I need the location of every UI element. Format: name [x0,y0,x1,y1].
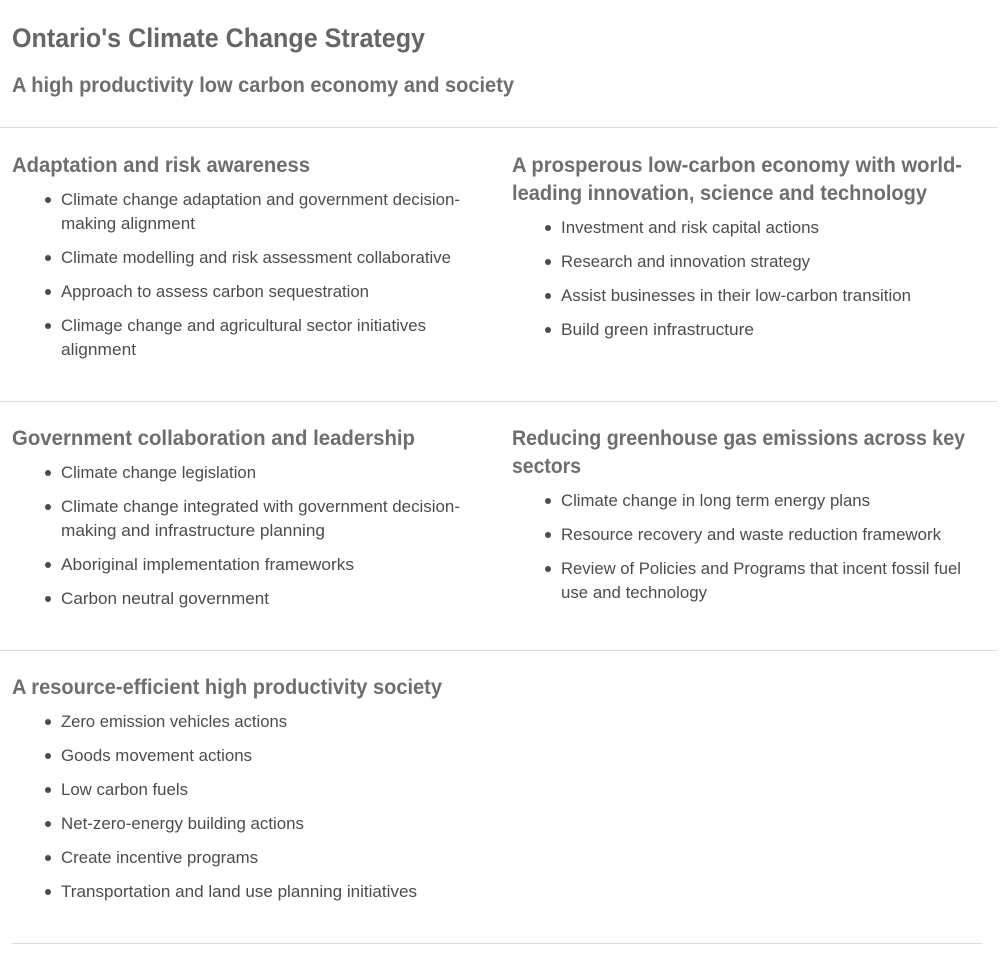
list: government items [45,464,460,608]
heading: emissions: Reducing greenhouse gas emissions across key [512,427,965,450]
heading: prosperous economy: leading innovation, science and technology [512,182,927,205]
list: government items: Climate change legislation [61,464,256,482]
heading: prosperous economy [512,154,962,205]
subtitle: A high productivity low carbon economy and society [12,74,514,97]
list: society items: Goods movement actions [61,747,252,765]
panel: adaptation and risk awareness [12,154,460,359]
list: emissions items: use and technology [561,584,708,602]
title: Ontario's Climate Change Strategy [12,23,425,53]
list: society items: Zero emission vehicles actions [61,713,287,731]
list: government items: Climate change integrated with government decision- [61,498,460,516]
list: adaptation items: making alignment [61,215,195,233]
list: adaptation items: Climage change and agricultural sector initiatives [61,317,426,335]
heading: emissions [512,427,965,478]
heading: society: A resource-efficient high productivity society [12,676,442,699]
list: adaptation items: Climate modelling and risk assessment collaborative [61,249,451,267]
panel: resource-efficient society [12,676,442,901]
list: economy items: Build green infrastructure [561,321,754,339]
list: economy items: Investment and risk capital actions [561,219,819,237]
list: society items [45,713,417,901]
list: economy items [545,219,911,339]
list: government items: Carbon neutral government [61,590,269,608]
list: adaptation items: Approach to assess carbon sequestration [61,283,369,301]
list: emissions items [545,492,961,602]
list: emissions items: Review of Policies and Programs that incent fossil fuel [561,560,961,578]
panel: prosperous low-carbon economy [512,154,962,339]
heading: adaptation: Adaptation and risk awareness [12,154,310,177]
heading: prosperous economy: A prosperous low-carbon economy with world- [512,154,962,177]
list: adaptation items: alignment [61,341,136,359]
list: society items: Create incentive programs [61,849,258,867]
list: society items: Net-zero-energy building actions [61,815,304,833]
heading: emissions: sectors [512,455,581,478]
list: government items: Aboriginal implementation frameworks [61,556,354,574]
heading: government: Government collaboration and leadership [12,427,415,450]
list: emissions items: Resource recovery and waste reduction framework [561,526,942,544]
panel: government collaboration [12,427,460,608]
list: adaptation items [45,191,460,359]
list: adaptation items: Climate change adaptation and government decision- [61,191,460,209]
list: emissions items: Climate change in long term energy plans [561,492,870,510]
list: society items: Low carbon fuels [61,781,188,799]
list: government items: making and infrastructure planning [61,522,325,540]
list: economy items: Assist businesses in their low-carbon transition [561,287,911,305]
list: economy items: Research and innovation strategy [561,253,811,271]
panel: reducing greenhouse gas emissions [512,427,965,602]
list: society items: Transportation and land use planning initiatives [61,883,417,901]
